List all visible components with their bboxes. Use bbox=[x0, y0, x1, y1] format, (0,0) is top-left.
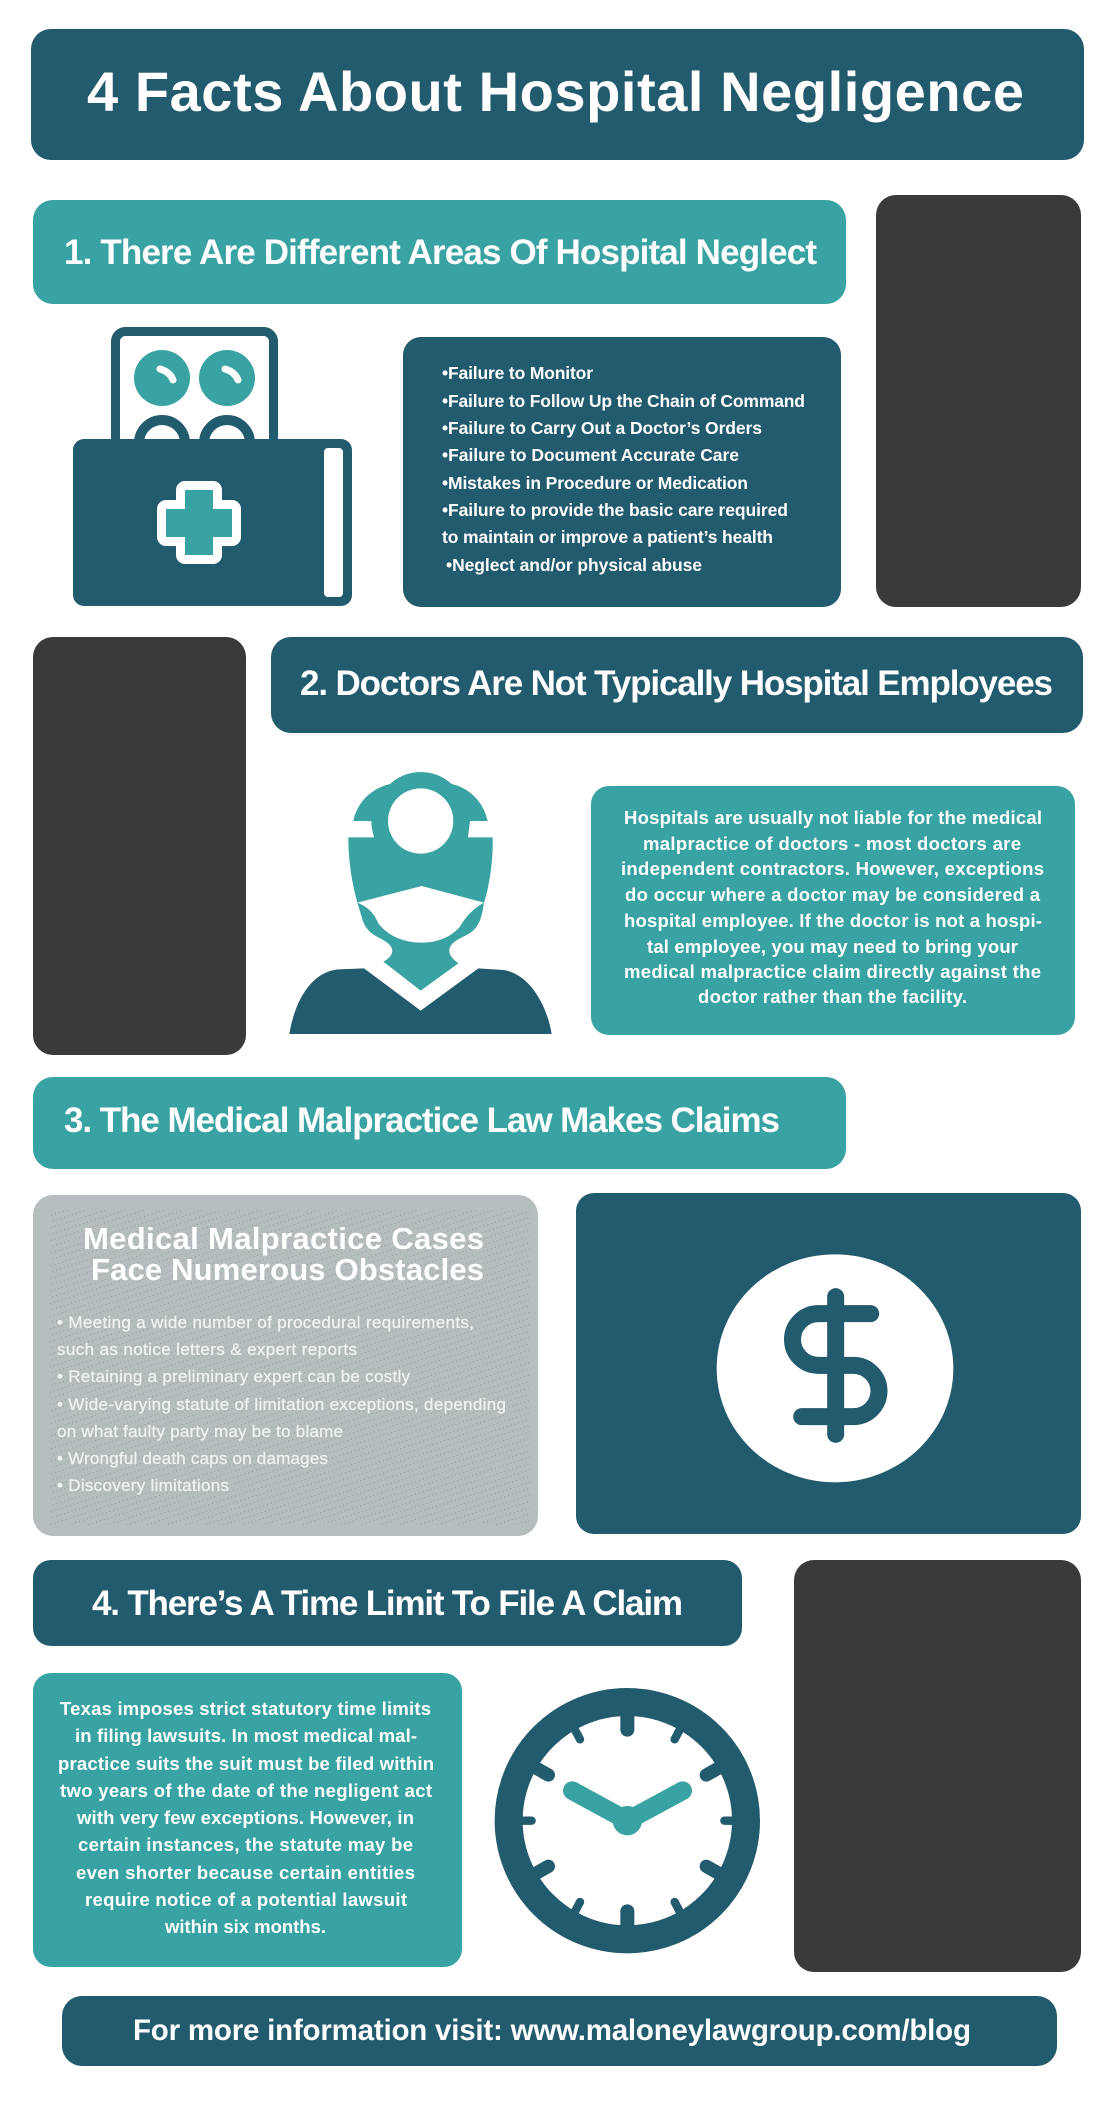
panel: statutory time limits: practice suits the suit must be filed within bbox=[58, 1753, 434, 1774]
panel: areas of neglect list bbox=[403, 337, 841, 607]
obstacles list: • Discovery limitations bbox=[57, 1476, 229, 1495]
panel: areas of neglect list: •Failure to Follow Up the Chain of Command bbox=[442, 391, 805, 411]
panel: statutory time limits bbox=[33, 1673, 462, 1967]
surgical mask bbox=[357, 886, 484, 943]
panel: areas of neglect list: •Failure to provide the basic care required bbox=[442, 500, 788, 520]
obstacles list bbox=[57, 1313, 506, 1495]
title: 4 Facts About Hospital Negligence bbox=[87, 60, 1024, 123]
kit body bbox=[73, 439, 352, 606]
pill pack bbox=[116, 332, 274, 466]
panel: statutory time limits: in filing lawsuits. In most medical mal- bbox=[75, 1725, 417, 1746]
head mirror bbox=[388, 788, 453, 854]
dark panel: section 2 bbox=[33, 637, 246, 1055]
panel: employment explanation: independent contractors. However, exceptions bbox=[621, 858, 1044, 879]
panel: areas of neglect list: •Failure to Monitor bbox=[442, 363, 593, 383]
panel: dollar icon bbox=[576, 1193, 1081, 1534]
obstacles list: • Retaining a preliminary expert can be costly bbox=[57, 1367, 410, 1386]
section 3 heading bbox=[33, 1077, 846, 1169]
section 3 heading: 3. The Medical Malpractice Law Makes Claims bbox=[64, 1101, 780, 1140]
obstacles list: • Meeting a wide number of procedural requirements, bbox=[57, 1313, 474, 1332]
panel: areas of neglect list: •Failure to Carry Out a Doctor’s Orders bbox=[442, 418, 762, 438]
section 2 heading bbox=[271, 637, 1083, 733]
panel: statutory time limits: even shorter because certain entities bbox=[76, 1862, 415, 1883]
footer call to action: For more information visit: www.maloneylawgroup.com/blog bbox=[133, 2014, 971, 2047]
obstacles list: on what faulty party may be to blame bbox=[57, 1422, 343, 1441]
dark panel: section 1 bbox=[876, 195, 1081, 607]
clock hands bbox=[572, 1791, 683, 1828]
panel: areas of neglect list: •Mistakes in Procedure or Medication bbox=[442, 473, 748, 493]
obstacles list: • Wide-varying statute of limitation exceptions, depending bbox=[57, 1395, 506, 1414]
obstacles heading: Face Numerous Obstacles bbox=[91, 1252, 484, 1287]
panel: employment explanation: hospital employee. If the doctor is not a hospi- bbox=[624, 910, 1042, 931]
panel: statutory time limits: with very few exceptions. However, in bbox=[76, 1807, 414, 1828]
kit cross bbox=[166, 490, 232, 555]
obstacles list: such as notice letters & expert reports bbox=[57, 1340, 357, 1359]
obstacles list: • Wrongful death caps on damages bbox=[57, 1449, 328, 1468]
panel: statutory time limits: within six months. bbox=[164, 1916, 326, 1937]
panel: employment explanation: tal employee, you may need to bring your bbox=[647, 936, 1018, 957]
icon: doctor with head mirror and mask bbox=[289, 772, 552, 1034]
panel: areas of neglect list: •Failure to Document Accurate Care bbox=[442, 445, 739, 465]
panel: employment explanation bbox=[591, 786, 1075, 1035]
section 1 heading: 1. There Are Different Areas Of Hospital Neglect bbox=[64, 233, 817, 272]
title banner bbox=[31, 29, 1084, 160]
panel: obstacles bbox=[33, 1195, 538, 1536]
panel: statutory time limits: two years of the date of the negligent act bbox=[60, 1780, 432, 1801]
panel: statutory time limits: certain instances, the statute may be bbox=[78, 1834, 413, 1855]
dark panel: section 4 bbox=[794, 1560, 1081, 1972]
panel: areas of neglect list: •Neglect and/or physical abuse bbox=[446, 555, 702, 575]
doctor body bbox=[289, 968, 552, 1034]
panel: employment explanation: malpractice of doctors - most doctors are bbox=[643, 833, 1021, 854]
panel: employment explanation: medical malpractice claim directly against the bbox=[624, 961, 1041, 982]
section 1 heading bbox=[33, 200, 846, 304]
footer call to action bbox=[62, 1996, 1057, 2066]
section 2 heading: 2. Doctors Are Not Typically Hospital Employees bbox=[300, 664, 1053, 703]
clock ticks bbox=[515, 1710, 740, 1931]
panel: areas of neglect list: to maintain or improve a patient’s health bbox=[442, 527, 773, 547]
panel: statutory time limits: require notice of a potential lawsuit bbox=[85, 1889, 407, 1910]
section 4 heading bbox=[33, 1560, 742, 1646]
panel: statutory time limits: Texas imposes strict statutory time limits bbox=[60, 1698, 431, 1719]
icon: clock bbox=[509, 1702, 746, 1939]
doctor head bbox=[348, 772, 493, 991]
panel: employment explanation: Hospitals are usually not liable for the medical bbox=[624, 807, 1042, 828]
section 4 heading: 4. There’s A Time Limit To File A Claim bbox=[92, 1584, 683, 1623]
panel: employment explanation: doctor rather than the facility. bbox=[698, 986, 967, 1007]
icon: medical kit with pills bbox=[73, 332, 352, 606]
obstacles heading bbox=[83, 1221, 484, 1287]
icon: dollar coin bbox=[717, 1254, 953, 1482]
panel: employment explanation: do occur where a doctor may be considered a bbox=[625, 884, 1041, 905]
kit handle bar bbox=[324, 448, 343, 597]
obstacles heading: Medical Malpractice Cases bbox=[83, 1221, 484, 1256]
